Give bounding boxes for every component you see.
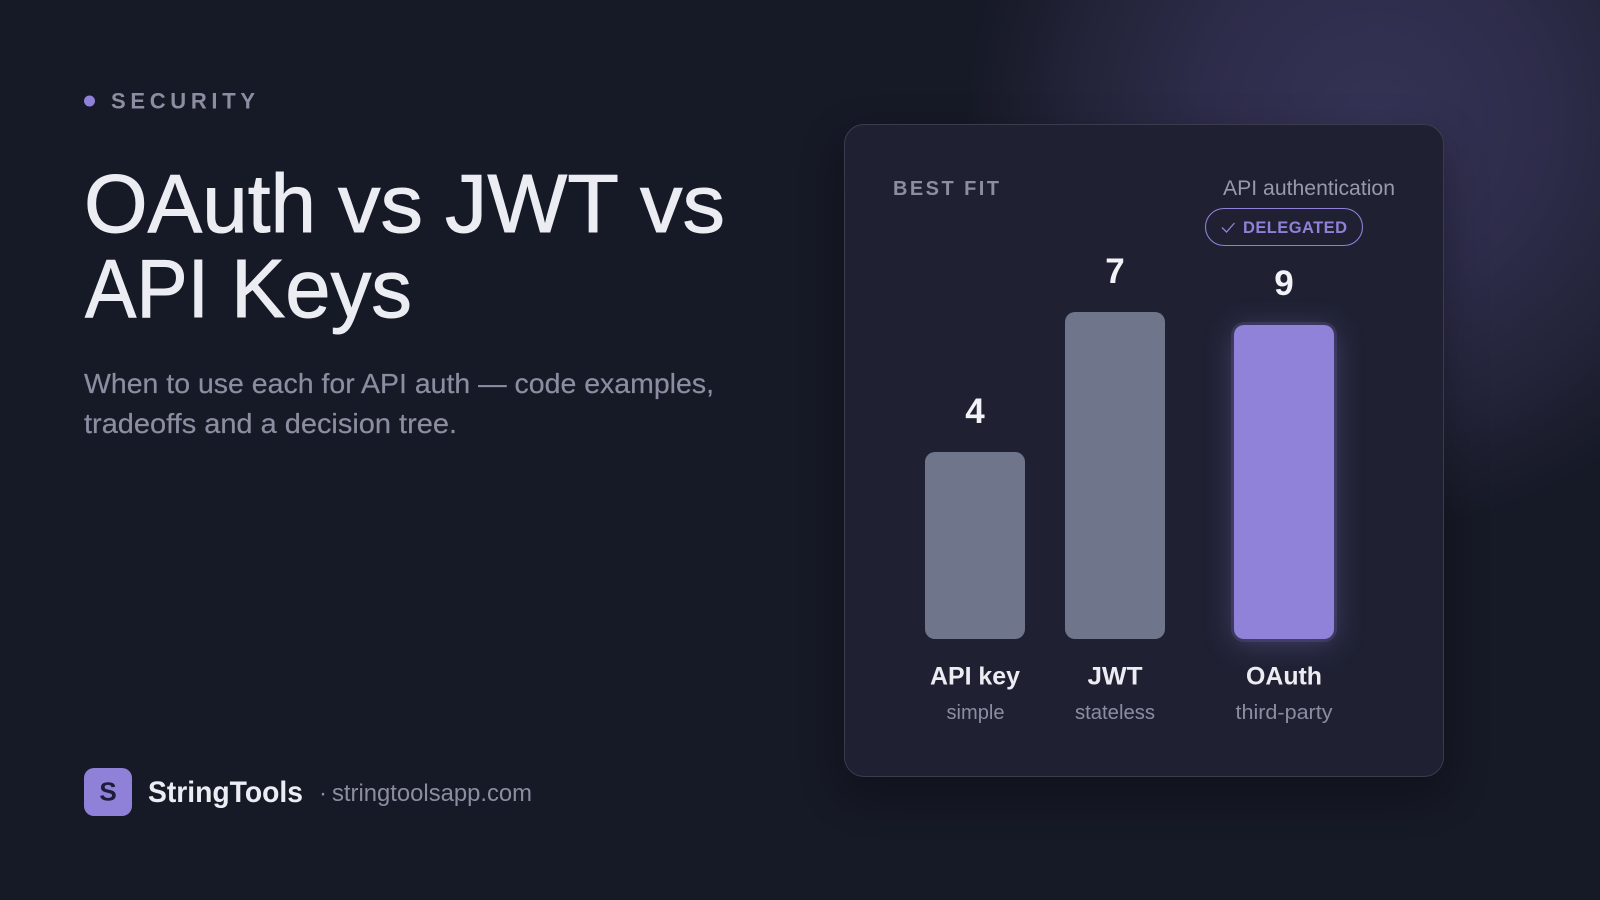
labels: JWT	[1075, 252, 1155, 724]
title: OAuth	[84, 157, 316, 250]
card heading: BEST FIT	[893, 178, 999, 200]
title: JWT	[445, 157, 619, 250]
title: API	[85, 242, 209, 335]
subtitle	[84, 368, 714, 439]
card context label: API authentication	[1223, 177, 1395, 200]
panel: best fit card	[844, 124, 1444, 777]
icon: check	[1222, 223, 1234, 232]
title: Keys	[231, 242, 412, 335]
icon: logo: S	[99, 776, 117, 806]
labels: OAuth: 9	[1274, 264, 1294, 303]
bar: API key value 4	[925, 452, 1025, 639]
labels: JWT: JWT	[1088, 662, 1142, 690]
brand url: stringtoolsapp.com	[332, 780, 532, 807]
labels: OAuth: OAuth	[1246, 662, 1322, 690]
bar column: JWT	[1065, 252, 1165, 724]
labels: API key: simple	[946, 702, 1004, 724]
title: vs	[640, 157, 725, 250]
badge: delegated	[1206, 208, 1362, 246]
title: vs	[338, 157, 423, 250]
labels: API key	[930, 392, 1020, 724]
labels: API key: API key	[930, 662, 1020, 690]
title	[84, 157, 725, 335]
labels: JWT: 7	[1105, 252, 1125, 291]
icon: logo	[84, 768, 132, 816]
badge: delegated: DELEGATED	[1243, 219, 1347, 237]
labels: JWT: stateless	[1075, 702, 1155, 724]
bar: OAuth value 9	[1234, 325, 1334, 639]
brand name: StringTools	[148, 776, 303, 809]
bar column: OAuth highlighted	[1220, 264, 1348, 724]
bar column: API key	[925, 392, 1025, 724]
labels: OAuth	[1236, 264, 1332, 724]
card header	[893, 177, 1395, 246]
brand footer	[84, 768, 532, 816]
labels: API key: 4	[965, 392, 985, 431]
subtitle: When to use each for API auth — code examples,	[84, 368, 714, 399]
bar: JWT value 7	[1065, 312, 1165, 639]
bar chart	[925, 252, 1348, 724]
eyebrow: security: SECURITY	[111, 88, 255, 114]
brand url: ·	[319, 780, 327, 807]
labels: OAuth: third-party	[1236, 702, 1332, 724]
subtitle: tradeoffs and a decision tree.	[84, 408, 457, 439]
